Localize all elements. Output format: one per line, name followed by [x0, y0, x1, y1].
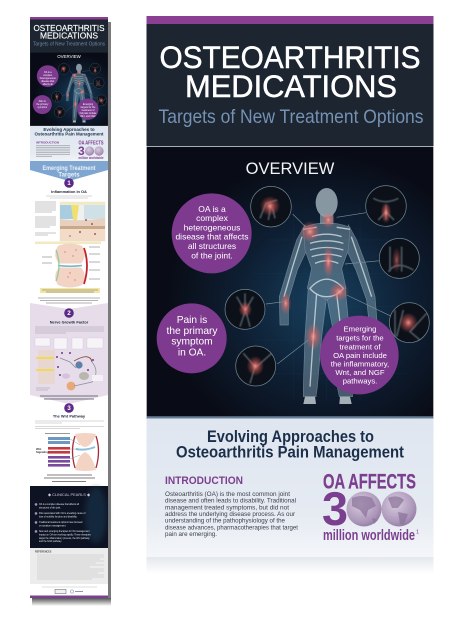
strip overview scene: disease that — [41, 80, 54, 83]
strip section 3: Wnt pathway — [35, 403, 104, 482]
strip joint diagram — [35, 242, 101, 288]
callout: emerging targets: Wnt, and NGF — [335, 368, 385, 377]
header background — [146, 24, 434, 146]
intro background — [146, 418, 434, 557]
strip section 2: nerve growth factor — [30, 303, 108, 404]
strip clinical pearls panel: loss of mobility function and disability. — [39, 515, 78, 518]
subtitle: Targets of New Treatment Options — [158, 106, 424, 128]
strip references: REFERENCES — [35, 550, 52, 554]
strip overview scene — [30, 53, 108, 126]
introduction text: address the underlying disease process. As our — [165, 511, 296, 518]
icon: globe Americas — [382, 492, 416, 526]
strip footer and logos — [42, 587, 97, 594]
statistic: OA affects 300 million worldwide: OA AFFECTS — [323, 470, 416, 494]
strip intro section: INTRODUCTION — [36, 140, 59, 144]
statistic: OA affects 300 million worldwide: 1 — [416, 530, 419, 536]
strip intro section: Evolving Approaches to — [43, 127, 95, 132]
callout: emerging targets: treatment of — [339, 342, 381, 352]
callout: emerging targets — [331, 324, 389, 386]
strip overview scene: complex — [43, 74, 53, 77]
strip bottom bar — [30, 596, 108, 598]
callout: OA definition: OA is a — [198, 204, 226, 214]
callout: emerging targets: the inflammatory, — [331, 360, 389, 368]
strip overview scene: symptom — [37, 106, 47, 109]
strip clinical pearls panel: structures of the joint. — [39, 506, 61, 509]
callout: emerging targets: OA pain include — [333, 351, 387, 360]
strip clinical pearls panel: New and emerging therapies for OA management — [39, 530, 90, 533]
strip header: Targets of New Treatment Options — [33, 42, 105, 48]
section heading: Evolving Approaches to — [207, 427, 374, 446]
callout: OA definition: disease that affects — [175, 232, 249, 242]
strip Wnt diagram: Wnt — [36, 447, 41, 451]
strip intro section: Osteoarthritis Pain Management — [34, 132, 104, 136]
section heading: Osteoarthritis Pain Management — [176, 442, 404, 462]
strip overview scene: OA pain include — [80, 112, 97, 115]
title: MEDICATIONS — [185, 68, 397, 104]
strip overview scene: Emerging — [83, 103, 94, 106]
callout: pain symptom: in OA. — [178, 347, 206, 358]
strip drop shadow — [32, 22, 111, 606]
strip page background — [30, 17, 108, 597]
strip intro section — [30, 126, 108, 164]
introduction text: disease and often leads to disability. Traditional — [165, 498, 296, 505]
strip section 2: nerve growth factor: 2 — [67, 310, 71, 317]
callout: emerging targets: Emerging — [344, 324, 376, 334]
statistic: OA affects 300 million worldwide: 3 — [322, 482, 348, 535]
strip clinical pearls panel: on symptom management. — [39, 524, 67, 527]
strip inflammation illustration — [60, 202, 105, 241]
strip clinical pearls panel: OA is a complex disease that affects all — [39, 503, 79, 506]
strip section 3: Wnt pathway: The Wnt Pathway — [53, 414, 86, 418]
strip overview scene: OA is a — [44, 71, 52, 74]
callout: OA definition: complex — [196, 213, 229, 223]
strip section 3: Wnt pathway: 3 — [67, 405, 71, 412]
strip header: OSTEOARTHRITIS — [34, 23, 105, 33]
strip overview scene: OVERVIEW — [57, 54, 82, 59]
strip references — [30, 548, 108, 584]
intro background reflection — [146, 557, 434, 574]
strip clinical pearls panel: Traditional treatment options have focused — [39, 521, 83, 524]
overview scene: skeleton, joint insets and purple callouts — [147, 147, 433, 417]
introduction text: understanding of the pathophysiology of the — [165, 518, 285, 525]
strip intro section: OA AFFECTS — [78, 140, 104, 146]
section heading — [176, 427, 404, 462]
strip highlighted callout — [40, 288, 100, 293]
strip clinical pearls panel — [30, 486, 108, 548]
top purple bar — [146, 16, 434, 24]
strip overview scene: affects all — [43, 83, 53, 86]
strip overview scene: treatment of — [82, 109, 95, 112]
introduction text: management treated symptoms, but did not — [165, 504, 289, 511]
strip overview scene: the primary — [36, 103, 49, 106]
callout: pain symptom: the primary — [167, 326, 218, 337]
callout: emerging targets: pathways. — [343, 376, 377, 386]
callout: pain symptom: symptom — [171, 337, 213, 348]
strip emerging targets banner — [30, 161, 108, 181]
callout: OA definition: heterogeneous — [184, 222, 240, 232]
strip nerve diagram — [36, 350, 103, 390]
strip header — [30, 20, 108, 52]
introduction text: pain are emerging. — [165, 531, 217, 538]
panel: thumbnail infographic strip — [30, 17, 111, 606]
introduction text: Osteoarthritis (OA) is the most common joint — [165, 491, 290, 498]
statistic: OA affects 300 million worldwide: million worldwide — [323, 528, 415, 544]
callout: pain symptom: Pain is — [177, 315, 207, 326]
separator line — [146, 417, 434, 418]
strip emerging targets banner: Emerging Treatment — [42, 166, 96, 172]
strip overview scene: Pain is — [39, 100, 47, 103]
strip Wnt diagram: Signaling — [36, 450, 49, 454]
panel: enlarged detail page — [146, 16, 434, 574]
strip clinical pearls panel: ◆ CLINICAL PEARLS ◆ — [48, 492, 91, 497]
strip clinical pearls panel: Pain associated with OA is a leading cause of — [39, 512, 86, 515]
callout: emerging targets: targets for the — [336, 334, 384, 342]
strip clinical pearls panel: target the inflammatory process, the Wnt pathway — [39, 537, 90, 540]
callout: OA definition: all structures — [188, 241, 236, 251]
strip emerging targets banner: Targets — [58, 172, 80, 178]
strip header: MEDICATIONS — [40, 31, 98, 41]
strip top bar — [30, 17, 108, 20]
title — [160, 39, 420, 104]
icon: globe Asia — [346, 492, 382, 526]
strip Wnt diagram — [36, 433, 98, 471]
introduction text: disease advances, pharmacotherapies that target — [165, 524, 298, 531]
strip clinical pearls panel: and the NGF pathway. — [39, 540, 62, 543]
strip section 1: inflammation — [35, 178, 105, 303]
strip intro section: 3 — [78, 144, 85, 158]
strip overview scene: targets for the — [81, 106, 96, 109]
callout: OA definition — [175, 204, 249, 260]
title: OSTEOARTHRITIS — [160, 39, 420, 75]
strip intro section: million worldwide — [78, 156, 104, 160]
overview heading: OVERVIEW — [246, 160, 335, 178]
strip section 1: inflammation: Inflammation in OA — [51, 189, 87, 194]
strip section 1: inflammation: 1 — [67, 180, 71, 187]
strip overview scene: heterogeneous — [40, 77, 56, 80]
callout: pain symptom — [167, 315, 218, 358]
callout: OA definition: of the joint. — [191, 250, 233, 260]
introduction heading: INTRODUCTION — [165, 475, 243, 487]
introduction text — [165, 491, 298, 538]
statistic: OA affects 300 million worldwide — [322, 470, 419, 544]
strip overview scene: Wnt, and NGF — [80, 115, 96, 118]
strip section 2: nerve growth factor: Nerve Growth Factor — [50, 320, 89, 324]
strip clinical pearls panel: impact on OA are evolving rapidly. These therapies — [39, 533, 92, 536]
